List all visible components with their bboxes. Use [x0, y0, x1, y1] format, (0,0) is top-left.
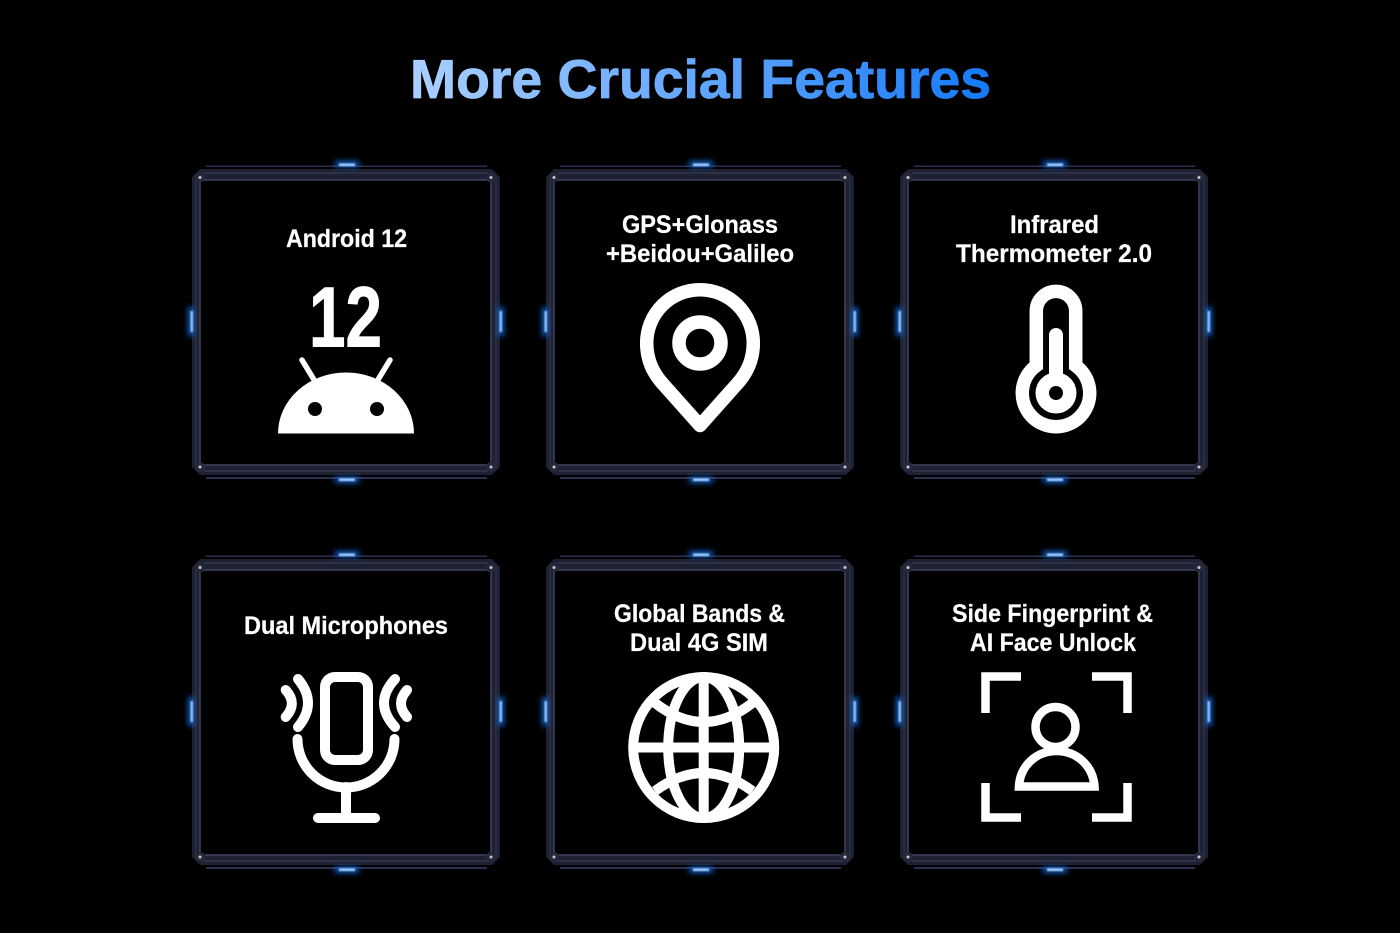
panel: Global Bands [542, 552, 858, 872]
panel: Infrared Thermometer [896, 162, 1212, 482]
panel: Android 12 [188, 162, 504, 482]
heading: GPS [606, 211, 794, 268]
frame: Infrared Thermometer [896, 162, 1212, 482]
heading: Dual Microphones: Dual Microphones [244, 612, 448, 640]
icon: Android 12 logo: 12 [309, 270, 382, 366]
heading: Global Bands: Global Bands & [614, 600, 785, 628]
frame: GPS [542, 162, 858, 482]
frame: Android 12 [188, 162, 504, 482]
heading: Global Bands: Dual 4G SIM [630, 629, 768, 657]
frame: Global Bands [542, 552, 858, 872]
heading: Side Fingerprint [952, 600, 1153, 657]
icon: location pin [647, 290, 753, 426]
icon: Android 12 logo [278, 270, 414, 434]
panel: Dual Microphones [188, 552, 504, 872]
title: More Crucial Features [410, 48, 991, 110]
heading: Side Fingerprint: AI Face Unlock [970, 629, 1136, 657]
icon: microphone [286, 677, 407, 818]
icon: globe [633, 677, 774, 818]
heading: GPS: GPS+Glonass [622, 211, 778, 239]
heading: Infrared Thermometer [956, 211, 1152, 268]
heading: Side Fingerprint: Side Fingerprint & [952, 600, 1153, 628]
heading: Infrared Thermometer: Thermometer 2.0 [956, 240, 1152, 268]
icon: thermometer [1022, 291, 1090, 427]
panel: Side Fingerprint and AI Face Unlock [896, 552, 1212, 872]
heading: Android 12: Android 12 [286, 225, 407, 253]
heading: Infrared Thermometer: Infrared [1010, 211, 1099, 239]
panel: GPS [542, 162, 858, 482]
icon: face scan [986, 676, 1128, 818]
frame: Dual Microphones [188, 552, 504, 872]
heading: Global Bands [614, 600, 785, 657]
heading: GPS: +Beidou+Galileo [606, 240, 794, 268]
frame: Side Fingerprint [896, 552, 1212, 872]
